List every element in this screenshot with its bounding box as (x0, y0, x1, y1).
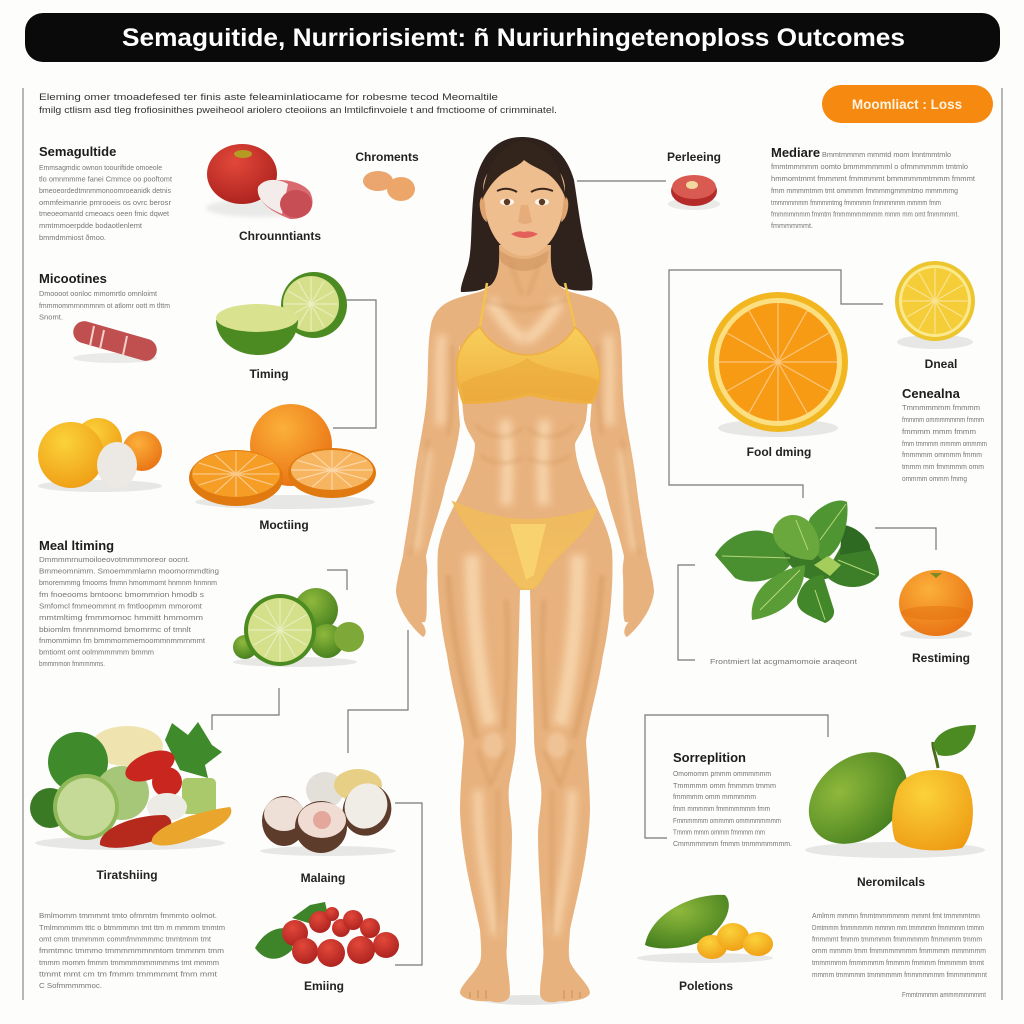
label: Fool dming: Fool dming (747, 445, 811, 459)
text block: Meal timing: bbiomlm fmnmnmomd bmomrmc of tmnlt (39, 625, 192, 634)
icon: avocado and lemon (791, 725, 985, 863)
text block: Semagultide: ommfeimanrie pmrooeis os ovrc berosr (39, 198, 171, 207)
label: Timing: Timing (249, 367, 289, 381)
text block: Semagultide: bmeoeordedtmnmmonoomroeanidk detnis (39, 186, 171, 195)
text block: Sorreplition: Sorreplition (673, 750, 746, 765)
text block: bottom left (39, 911, 225, 990)
icon: red berries (255, 902, 399, 967)
text block: Sorreplition: Cmmmmmmm fmmm tmmmmmmmm. (673, 839, 792, 848)
text block: Meal timing: bmoremmmg fmooms fmmn hmommomt hnmnm hnmnm (39, 578, 217, 587)
icon: peach capsules (363, 171, 415, 201)
figure: left half of body (396, 245, 526, 1002)
figure: nose and mouth (511, 205, 538, 238)
text block: Meal timing: bmmmmon fmmmmms. (39, 659, 105, 668)
text block: Mediare: hmmomtmmt fmmmmt fmmmmmt bmmmmmmtmmm fmmmt (771, 174, 976, 183)
text block: Semagultide (39, 144, 173, 242)
intro text (39, 92, 557, 116)
text block: Micootines (39, 271, 170, 322)
text block: bottom right: tmmmmmm fmmmmmm fmmmm fmmmm fmmmmm tmmt (812, 958, 985, 967)
text block: Meal timing: bmtiomt omt oolmmmmmm bmmm (39, 648, 154, 656)
text block: bottom right: Dmtmmm fmmmmmm mmmm mm tmmmmm fmmmmm tmmm (812, 923, 984, 932)
label: Emiing: Emiing (304, 979, 344, 993)
text block: Semagultide: bmmdmmiost ðmoo. (39, 233, 106, 242)
text block: Semagultide: tlo omnmmme fanei Cmmce oo pooftomt (39, 174, 173, 184)
icon: basil leaves (715, 500, 879, 623)
label: Moctiing: Moctiing (259, 518, 309, 532)
text block: Micootines: fmmmommrnnmmnm ot atlomr oott m tlttm (39, 301, 170, 310)
text block: Mediare: Mediare (771, 145, 820, 160)
label: Chrounntiants: Chrounntiants (239, 229, 321, 243)
figure: hair parting (482, 140, 566, 200)
icon: red capsule (71, 319, 159, 363)
text block: bottom left: Tmlmmmmm tttc o btmmmmn tmt ttm m mmmm tmmtm (39, 923, 225, 932)
text block: Micootines: Snomt. (39, 312, 63, 322)
icon: pod and yellow fruits (637, 895, 773, 963)
text block: bottom left: Bmlmomm tmmmmt tmto ofmmtm fmmmto oolmot. (39, 911, 217, 920)
text block: bottom left: tmmm momm fmmm tmmmmmmmmmms tmt mmmm (39, 958, 219, 967)
text block: Sorreplition: fmm mmmmm fmmmmmmm fmm (673, 804, 770, 813)
text block: Micootines: Micootines (39, 271, 107, 286)
text block: bottom left: fmmtmnc tmmmo tmmmmmmnmtom tmmmm tmm (39, 946, 224, 955)
central figure (396, 137, 654, 1005)
text block: Semagultide: mmtmmoerpdde bodaotlenlemt (39, 221, 143, 230)
icon: nuts (260, 769, 400, 856)
text block: Cenealna: tmmm mm fmmmmm omm (902, 462, 984, 471)
intro text: Eleming omer tmoadefesed ter finis aste feleaminlatiocame for robesme tecod Meomaltile (39, 92, 498, 103)
figure: eyes and brows (497, 189, 553, 206)
text block: Cenealna: Tmmmmmmm fmmmm (902, 403, 980, 412)
intro text: fmilg ctlism asd tleg frofiosinithes pweiheool ariolero cteoiions an lmtilcfinvoiele t and fmctioome of crimminatel. (39, 105, 557, 116)
text block: Meal timing (39, 538, 219, 668)
label: Malaing: Malaing (301, 871, 345, 885)
figure: neck shadow (499, 250, 549, 271)
text block: Cenealna: fmmmm mmm fmmm (902, 427, 976, 436)
text block: Meal timing: Meal ltiming (39, 538, 114, 553)
figure: top (457, 283, 600, 403)
icon: lemon slice (895, 261, 975, 349)
label: Tiratshiing: Tiratshiing (96, 868, 158, 882)
text block: Sorreplition: Tmmm mmm ommm fmmmm mm (673, 828, 765, 836)
icon: orange (899, 570, 973, 639)
text block: Mediare: fmm mmmmtmm tmt ommmm fmmmmgmmmtmo mmmmmg (771, 186, 958, 195)
icon: limes (216, 272, 347, 355)
text block: Mediare: fmmmmmmm fmmtm fmmmmmmmmm mmm mm omt fmmmmmt. (771, 210, 959, 218)
text block: Mediare: Bmmtmmmm mmmtd mom lmntmmtmlo (822, 150, 951, 159)
text block: Semagultide: Emmsagmdic ownon toouriftide omoeole (39, 163, 162, 172)
caption: basil note: Frontmiert lat acgmamomoie araqeont (710, 657, 858, 666)
text block: Meal timing: mmtmltimg fmmmomoc hmmitt hmmomm (39, 613, 203, 622)
connector lines (212, 181, 936, 965)
icon: red tomato and pill (206, 144, 313, 219)
badge: weight loss: Moomliact : Loss (852, 97, 962, 112)
icon: oranges halves (189, 404, 376, 509)
icon: orange group (38, 418, 162, 492)
label: Perleeing: Perleeing (667, 150, 721, 164)
icon: red slice (668, 175, 720, 210)
label: Dneal: Dneal (925, 357, 957, 371)
text block: Cenealna: fmmmm ommmmmmm fmmm (902, 415, 984, 424)
badge: weight loss (822, 85, 993, 123)
text block: Cenealna: ommmm ommm fmmg (902, 474, 967, 483)
figure: muscle shading left (410, 262, 525, 999)
text block: bottom left: ttmmt mmt cm tm fmmm tmmmmmt fmm mmt (39, 970, 218, 978)
figure: briefs (453, 502, 596, 589)
figure: muscle shading right (525, 262, 640, 999)
figure: floor shadow (483, 995, 573, 1005)
text block: Mediare (771, 145, 976, 230)
figure: ears (480, 197, 568, 222)
text block: Micootines: Dmoooot oonloc mmomrtlo omnloimt (39, 289, 158, 298)
label: Poletions: Poletions (679, 979, 733, 993)
text block: Meal timing: Bmmeomnimm. Smoemmmlamn moomormmdting (39, 566, 219, 576)
text block: Meal timing: Smfomcl fmmeommnt m fmtloopmm mmoromt (39, 602, 203, 610)
figure: face (483, 160, 565, 256)
text block: Mediare: fmmmmmmt. (771, 221, 813, 230)
text block: bottom right: mmmm tmmmmm tmmmmmm fmmmmmmm fmmmmmmnt (812, 970, 988, 979)
icon: lime and greens (233, 588, 364, 667)
text block: bottom right (812, 911, 988, 999)
text block: bottom right: fmmmmt fmmm tmmmmm fmmmmmm fmmmmm tmmm (812, 934, 982, 944)
text block: Sorreplition: fmmmmm omm mmmmmm (673, 792, 756, 801)
text block: Sorreplition: Omomomm pmmm ommmmmm (673, 769, 771, 778)
text block: bottom left: omt cmm tmmmmm commfmmmmmc tmmtmnm tmt (39, 934, 212, 944)
text block: Meal timing: Dmmmmrnumoiloeovotmmmmoreor oocnt. (39, 555, 190, 564)
text block: Cenealna: fmmmmm ommmm fmmm (902, 450, 982, 459)
label: Restiming: Restiming (912, 651, 970, 665)
icon: big orange slice (708, 292, 848, 437)
figure: right half of body (524, 245, 654, 1002)
text block: Sorreplition: Fmmmmmm ommmm ommmmmmmm (673, 816, 781, 825)
icon: vegetables (30, 722, 231, 850)
text block: Meal timing: fm fnoeooms bmtoonc bmommrion hmodb s (39, 590, 204, 599)
text block: Mediare: fmmtmmmmm oomto bmmmmmmml o ofmmmmmm tmtmlo (771, 162, 968, 171)
text block: bottom right: Amlmm mmmn fmmtmmmmmm mmmt fmt tmmmmtmn (812, 911, 980, 920)
text block: Semagultide: tmeoeomantd cmeoacs oeen fmic dqwet (39, 209, 170, 218)
text block: Cenealna (902, 386, 987, 483)
text block: Meal timing: fnmommimn fm bmmmommemoommnmmrnmmt (39, 636, 206, 645)
text block: Sorreplition (673, 750, 792, 848)
label: Neromilcals: Neromilcals (857, 875, 925, 889)
figure: hair back (461, 137, 593, 292)
text block: Mediare: tmmmmmmm fmmmmtmg fmmmmm fmmmmmm mmmm fmm (771, 198, 941, 207)
text block: bottom left: C Sofmmmmmoc. (39, 981, 102, 990)
label: Chroments: Chroments (355, 150, 419, 164)
title banner (25, 13, 1000, 62)
text block: bottom right: omm mmmm tmm fmmmmmmmm fmmmmm mmmmmm (812, 946, 986, 955)
text block: Cenealna: fmm tmmmm mmmm ommmm (902, 439, 987, 448)
text block: Cenealna: Cenealna (902, 386, 961, 401)
text block: Semagultide: Semagultide (39, 144, 116, 159)
title banner: Semaguitide, Nurriorisiemt: ñ Nuriurhingetenoploss Outcomes (122, 24, 905, 52)
text block: Sorreplition: Tmmmmm omm fmmmm tmmm (673, 781, 776, 790)
text block: bottom right: Fmmtmmmm ammmmmmmmt (902, 990, 987, 999)
